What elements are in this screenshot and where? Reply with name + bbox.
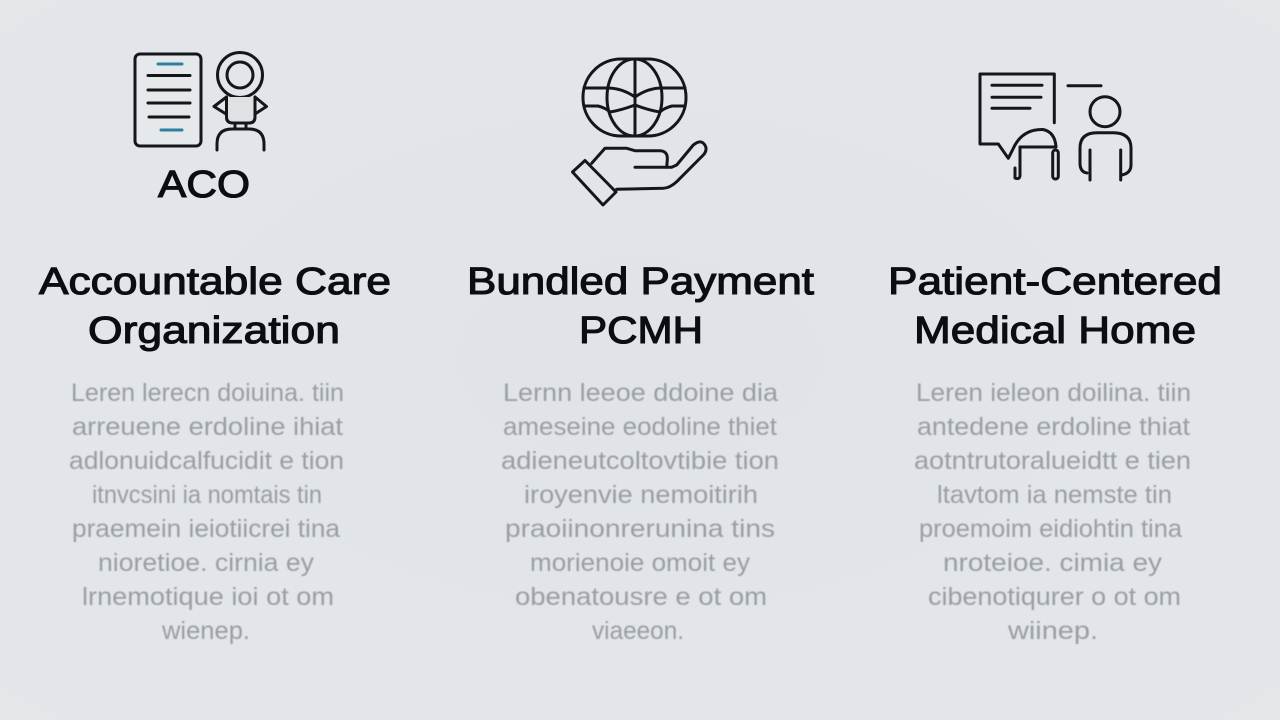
text block: description three: cibenotiqurer o ot om <box>928 583 1181 611</box>
icon: document and person <box>135 52 266 150</box>
text block: description one <box>69 379 344 645</box>
text block: description one: adlonuidcalfucidit e tion <box>69 447 344 475</box>
heading: Bundled Payment PCMH: Bundled Payment <box>467 261 814 303</box>
heading: Bundled Payment PCMH <box>467 261 814 352</box>
heading: Accountable Care Organization <box>39 261 391 352</box>
heading: Accountable Care Organization: Accountable Care <box>39 261 391 303</box>
text block: description two: morienoie omoit ey <box>530 549 751 577</box>
text block: description two: praoiinonrerunina tins <box>505 515 775 543</box>
text block: description one: arreuene erdoline ihiat <box>72 413 343 441</box>
heading: Bundled Payment PCMH: PCMH <box>579 310 703 352</box>
text block: description one: nioretioe. cirnia ey <box>98 549 315 577</box>
text block: description three: aotntrutoralueidtt e tien <box>914 447 1191 475</box>
panel: Accountable Care Organization <box>39 52 391 645</box>
text block: description one: Leren lerecn doiuina. tiin <box>71 379 344 407</box>
icon: speech bubble and people <box>980 74 1131 180</box>
icon: globe over open hand <box>572 59 706 205</box>
panel: Patient-Centered Medical Home <box>888 74 1222 645</box>
heading: Accountable Care Organization: Organization <box>88 310 340 352</box>
text block: description two: ameseine eodoline thiet <box>503 413 777 441</box>
text block: description three: ltavtom ia nemste tin <box>937 481 1172 509</box>
text block: description three <box>914 379 1191 645</box>
text block: description two: obenatousre e ot om <box>515 583 767 611</box>
text block: description three: nroteioe. cimia ey <box>943 549 1163 577</box>
ACO label: ACO <box>158 164 250 206</box>
text block: description one: lrnemotique ioi ot om <box>82 583 334 611</box>
text block: description two: iroyenvie nemoitirih <box>524 481 758 509</box>
text block: description three: wiinep. <box>1007 617 1098 645</box>
text block: description two: viaeeon. <box>592 617 684 645</box>
panel: Bundled Payment PCMH <box>467 59 814 645</box>
text block: description three: proemoim eidiohtin tina <box>919 515 1182 543</box>
heading: Patient-Centered Medical Home: Patient-Centered <box>888 261 1222 303</box>
text block: description two: adieneutcoltovtibie tion <box>501 447 779 475</box>
text block: description one: praemein ieiotiicrei tina <box>72 515 340 543</box>
text block: description one: itnvcsini ia nomtais tin <box>92 481 322 509</box>
text block: description three: antedene erdoline thiat <box>917 413 1190 441</box>
text block: description two <box>501 379 779 645</box>
text block: description three: Leren ieleon doilina. tiin <box>916 379 1191 407</box>
heading: Patient-Centered Medical Home: Medical Home <box>914 310 1196 352</box>
text block: description one: wienep. <box>161 617 250 645</box>
text block: description two: Lernn leeoe ddoine dia <box>503 379 778 407</box>
heading: Patient-Centered Medical Home <box>888 261 1222 352</box>
